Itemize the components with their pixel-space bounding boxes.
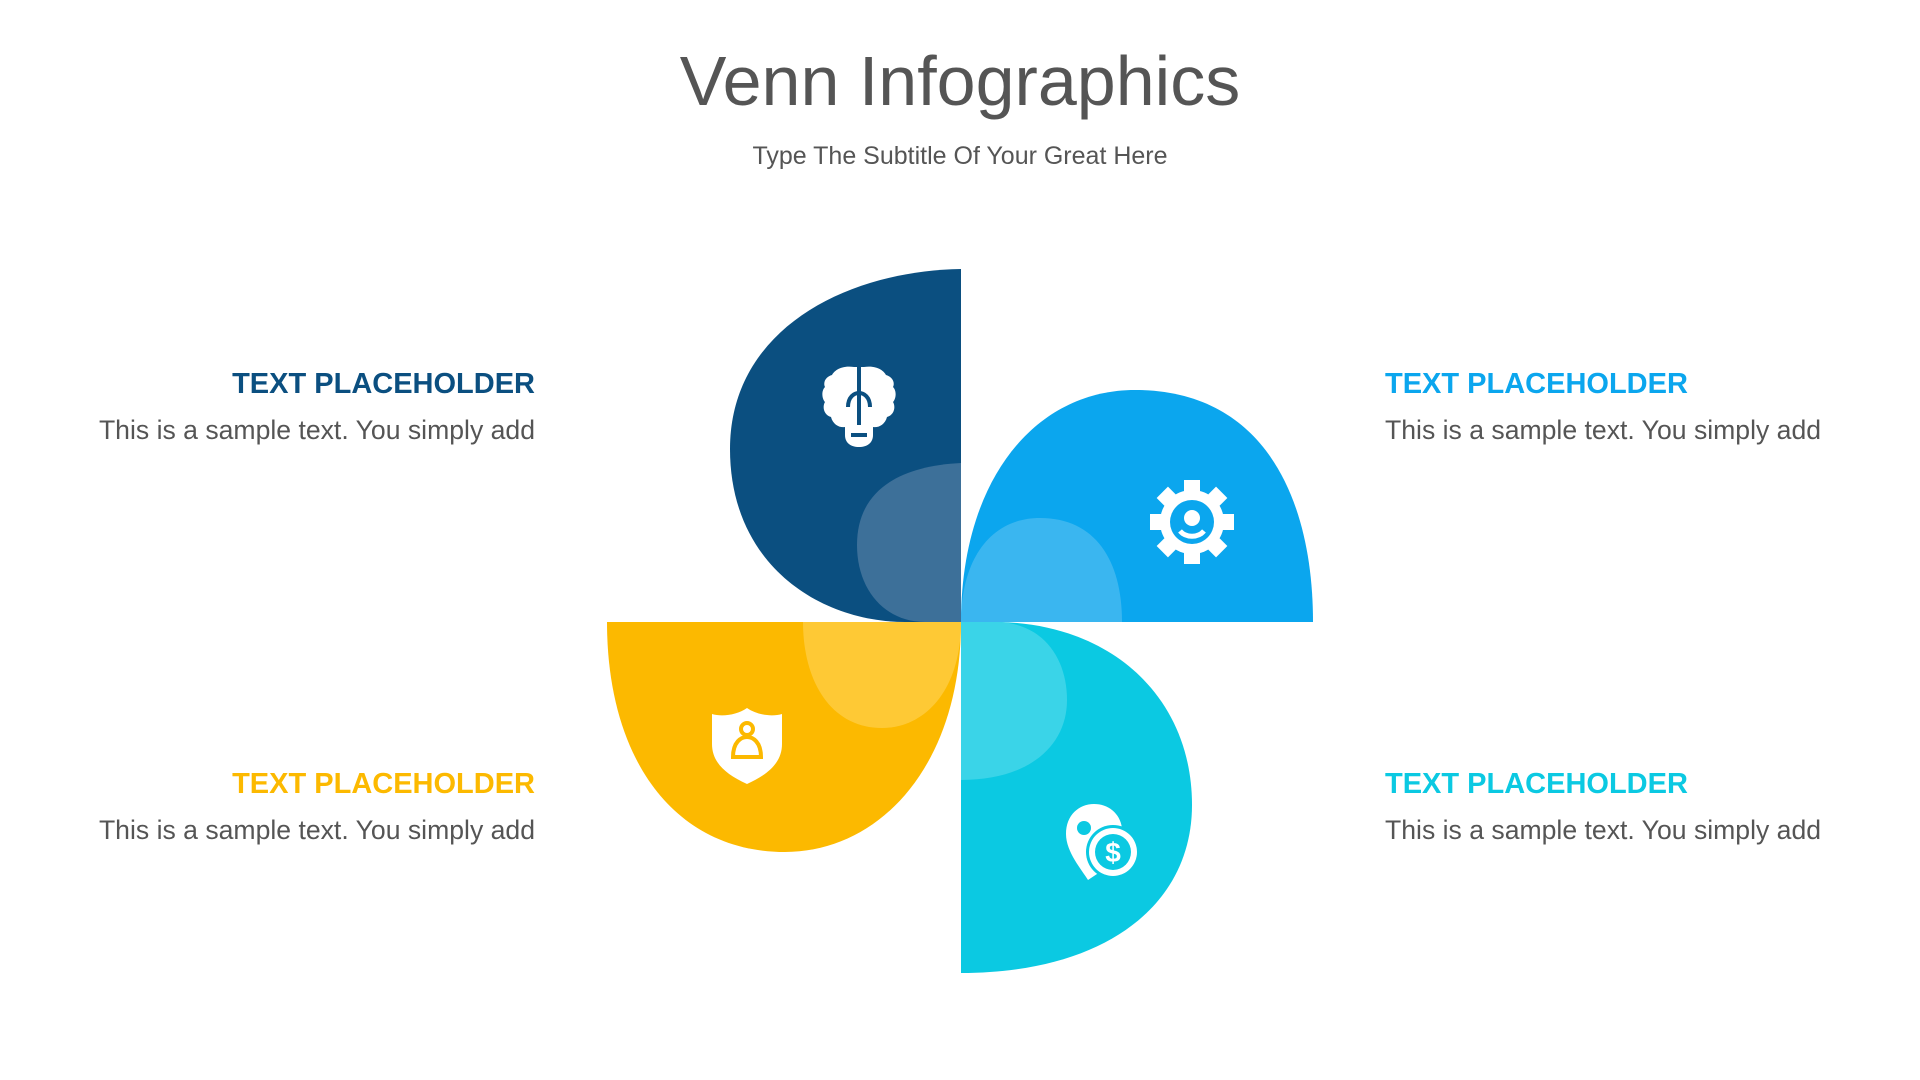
title: Venn Infographics <box>680 42 1240 120</box>
petal: light blue <box>960 380 1320 623</box>
text block: top-left: This is a sample text. You simply add <box>99 415 535 445</box>
petal: dark blue <box>730 269 961 622</box>
subtitle: Type The Subtitle Of Your Great Here <box>752 142 1168 170</box>
text block: top-left: TEXT PLACEHOLDER <box>232 368 535 400</box>
text block: top-left <box>99 368 535 445</box>
icon: location pin dollar <box>1066 804 1140 880</box>
text block: bottom-right <box>1385 768 1821 845</box>
icon: location pin dollar: $ <box>1105 837 1121 868</box>
text block: bottom-left: This is a sample text. You simply add <box>99 815 535 845</box>
petal: cyan <box>960 620 1200 980</box>
text block: bottom-left <box>99 768 535 845</box>
text block: top-right: TEXT PLACEHOLDER <box>1385 368 1688 400</box>
icon: shield user <box>712 708 782 784</box>
text block: bottom-right: This is a sample text. You simply add <box>1385 815 1821 845</box>
venn pinwheel diagram <box>607 269 1313 973</box>
icon: brain bulb <box>822 367 896 447</box>
text block: top-right: This is a sample text. You simply add <box>1385 415 1821 445</box>
text block: bottom-right: TEXT PLACEHOLDER <box>1385 768 1688 800</box>
icon: gear user <box>1150 480 1234 564</box>
petal: yellow <box>600 622 962 862</box>
text block: top-right <box>1385 368 1821 445</box>
text block: bottom-left: TEXT PLACEHOLDER <box>232 768 535 800</box>
